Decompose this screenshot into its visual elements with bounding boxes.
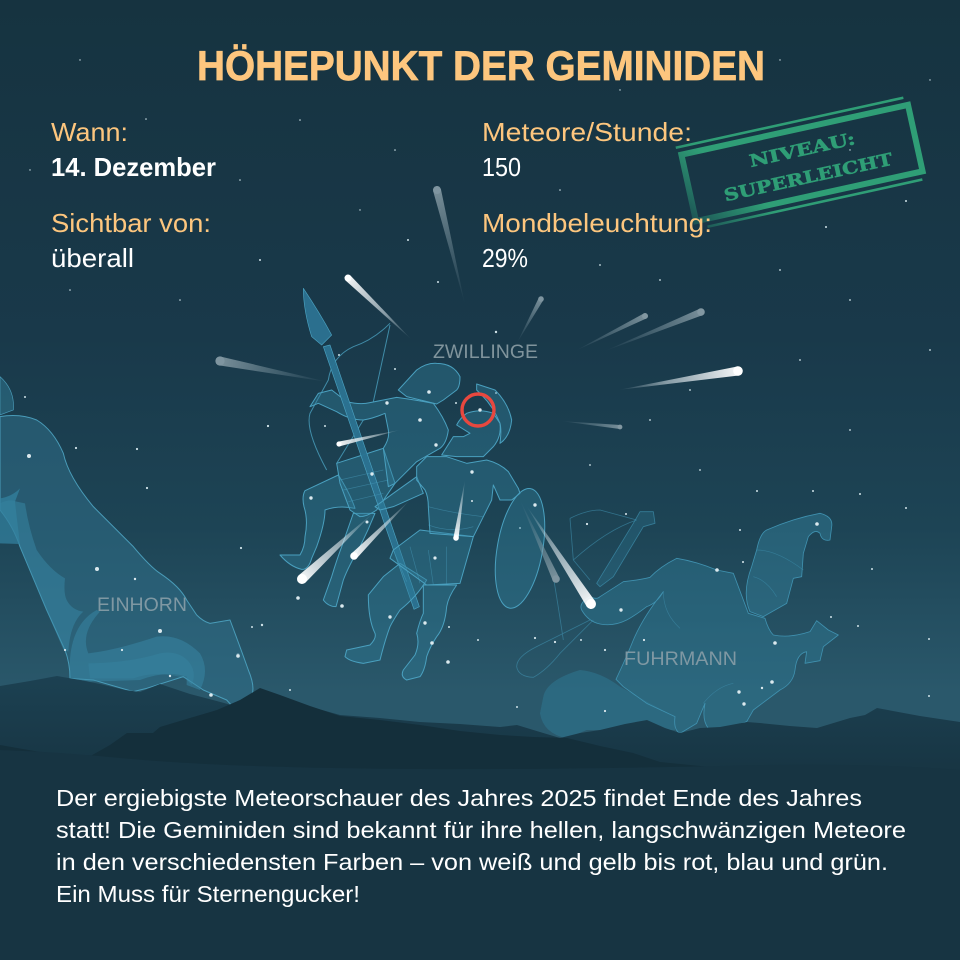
Fuhrmann inner lines xyxy=(663,550,803,703)
spear xyxy=(303,288,419,609)
value date: 14. Dezember xyxy=(51,152,216,182)
shield xyxy=(487,485,553,612)
marker: radiant circle xyxy=(462,394,494,426)
body line 4: Ein Muss für Sternengucker! xyxy=(56,881,360,907)
armour and skirt details xyxy=(340,470,483,585)
meteor grey beside shield xyxy=(516,498,561,584)
Einhorn inner hind stripe xyxy=(88,653,194,685)
label: Einhorn: EINHORN xyxy=(97,595,187,616)
value überall: überall xyxy=(51,243,134,273)
meteor left grey xyxy=(215,356,329,387)
constellation: Zwillinge xyxy=(280,288,553,680)
whip handle xyxy=(597,512,655,587)
helmet of right twin xyxy=(442,411,500,457)
value 150: 150 xyxy=(482,152,521,182)
title: HÖHEPUNKT DER GEMINIDEN xyxy=(197,42,765,89)
value 29 percent: 29% xyxy=(482,243,528,273)
Einhorn mane xyxy=(0,377,13,415)
helmet of left twin xyxy=(398,363,460,404)
meteors xyxy=(215,185,743,611)
spear head xyxy=(303,288,332,345)
mountains back range xyxy=(0,676,960,780)
label: Fuhrmann: FUHRMANN xyxy=(624,649,737,670)
stamp text line 1: NIVEAU: xyxy=(747,129,857,172)
body text xyxy=(56,785,906,907)
label: Zwillinge: ZWILLINGE xyxy=(433,342,538,363)
stamp outer lines xyxy=(676,97,922,230)
info block: Sichtbar von xyxy=(51,208,211,273)
meteor lower left large xyxy=(295,509,376,586)
info block: Meteore pro Stunde xyxy=(482,117,692,182)
info block: Mondbeleuchtung xyxy=(482,208,712,273)
Fuhrmann body xyxy=(581,558,838,733)
Einhorn hind leg bands xyxy=(70,610,205,690)
label Sichtbar von: Sichtbar von: xyxy=(51,208,211,238)
meteor shield bright xyxy=(522,503,598,611)
stamp: Niveau superleicht xyxy=(676,97,924,230)
skirt of right twin xyxy=(390,530,473,585)
back leg of left twin xyxy=(323,513,375,607)
body line 1: Der ergiebigste Meteorschauer des Jahres 2025 findet Ende des Jahres xyxy=(56,785,862,811)
meteor lower left second xyxy=(349,497,413,561)
whip and reins outline xyxy=(517,510,637,677)
right twin arm xyxy=(375,477,423,510)
bow xyxy=(309,323,390,470)
Einhorn body xyxy=(0,416,253,707)
front leg of left twin xyxy=(280,475,355,569)
constellation stars xyxy=(27,390,819,712)
meteor right bright xyxy=(618,366,743,395)
label Mondbeleuchtung: Mondbeleuchtung: xyxy=(482,208,712,238)
constellation: Einhorn xyxy=(0,377,253,707)
meteor on right twin xyxy=(453,479,468,541)
footer panel xyxy=(0,750,960,960)
meteor top centre xyxy=(432,185,469,306)
stamp frame xyxy=(681,105,923,221)
spear shaft xyxy=(323,345,419,609)
meteor right faint xyxy=(560,419,623,430)
stamp text line 2: SUPERLEICHT xyxy=(722,150,895,206)
right leg of right twin xyxy=(402,585,457,680)
torso of right twin xyxy=(417,457,520,537)
meteor right 1 xyxy=(574,312,649,354)
meteor upper left xyxy=(343,273,414,342)
lower leg xyxy=(540,670,675,738)
body line 2: statt! Die Geminiden sind bekannt für ihre hellen, langschwänzigen Meteore xyxy=(56,817,906,843)
constellation: Fuhrmann xyxy=(517,510,838,738)
Einhorn chest top xyxy=(0,488,20,544)
crest of right twin xyxy=(477,384,512,443)
scattered stars xyxy=(24,59,931,708)
Einhorn foreleg band xyxy=(0,500,83,652)
label Wann: Wann: xyxy=(51,117,128,147)
body line 3: in den verschiedensten Farben – von weiß und gelb bis rot, blau und grün. xyxy=(56,849,888,875)
skirt of left twin xyxy=(337,448,395,517)
label Meteore/Stunde: Meteore/Stunde: xyxy=(482,117,692,147)
left leg of right twin xyxy=(345,563,427,663)
meteor on left twin xyxy=(336,427,401,447)
Fuhrmann hat and face xyxy=(746,513,832,617)
meteor right 2 xyxy=(603,307,706,355)
torso of left twin xyxy=(310,390,448,487)
meteor near label xyxy=(515,295,545,344)
info block: Wann xyxy=(51,117,216,182)
mountains front range xyxy=(0,688,720,772)
